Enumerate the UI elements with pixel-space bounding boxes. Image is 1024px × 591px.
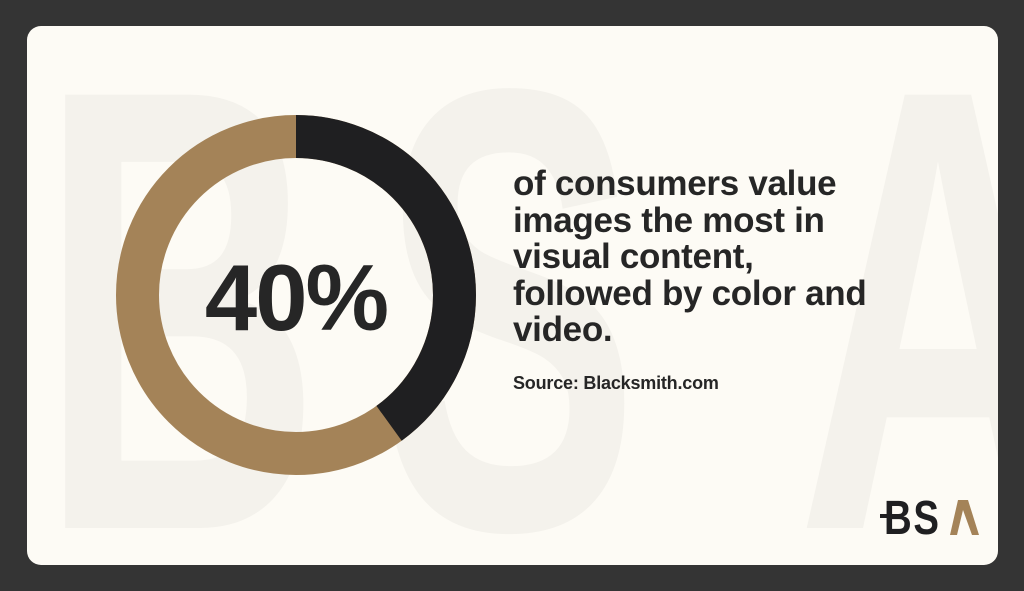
- source: Source: Blacksmith.com: [513, 373, 719, 393]
- logo: BSA: [880, 498, 979, 538]
- text block: description: images the most in: [513, 200, 825, 240]
- text block: description: [513, 164, 866, 349]
- text block: description: visual content,: [513, 237, 754, 276]
- text block: description: video.: [513, 310, 612, 349]
- text block: description: of consumers value: [513, 164, 836, 203]
- text block: description: followed by color and: [513, 274, 866, 312]
- stat: 40%: 40%: [205, 245, 387, 350]
